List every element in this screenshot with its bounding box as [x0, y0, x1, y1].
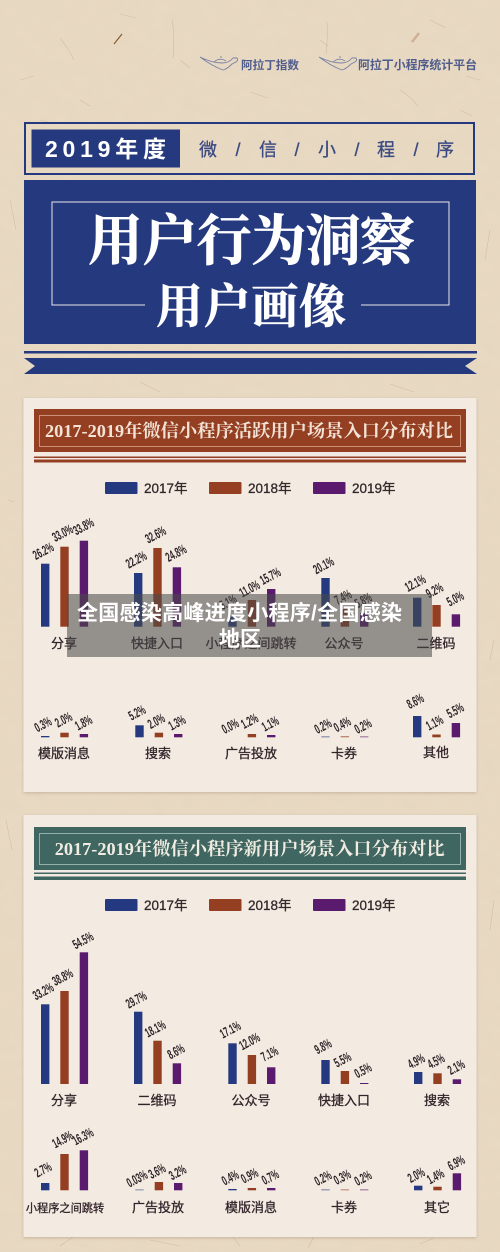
chart: 小程序之间跳转 — [26, 1125, 104, 1215]
chart: 快捷入口 — [312, 1036, 375, 1108]
chart: 快捷入口: 22.2% — [124, 549, 150, 572]
icon: Aladdin lamp right — [319, 56, 357, 70]
subject text: 微 — [199, 140, 217, 160]
chart: 其它: 6.9% — [446, 1153, 468, 1174]
chart: 公众号: 7.1% — [259, 1044, 281, 1065]
chart: 公众号 — [218, 1019, 281, 1108]
chart: 卡券: 卡券 — [331, 1200, 357, 1215]
chart: 分享: 分享 — [51, 1093, 77, 1108]
panel: new users — [24, 815, 476, 1237]
logos: Aladdin index and stats platform — [200, 56, 477, 72]
chart: 广告投放: 3.6% — [146, 1161, 169, 1182]
subject text — [199, 140, 454, 160]
chart: 广告投放 — [124, 1161, 189, 1215]
chart: 二维码: 二维码 — [416, 636, 456, 651]
chart: 模版消息: 0.7% — [260, 1167, 282, 1188]
chart: 公众号: 12.0% — [237, 1030, 263, 1054]
chart: 小程序之间跳转: 小程序之间跳转 — [205, 636, 297, 651]
chart: 模版消息: 模版消息 — [225, 1200, 277, 1215]
main title panel — [24, 180, 476, 344]
chart: 公众号: 公众号 — [324, 636, 364, 651]
heading: new users: 2017-2019年微信小程序新用户场景入口分布对比 — [55, 838, 445, 859]
chart: 卡券: 0.2% — [312, 1168, 335, 1189]
heading: active users — [34, 409, 466, 462]
chart: 模版消息 — [32, 710, 95, 761]
chart: 分享 — [31, 515, 97, 651]
text: Aladdin mini program stats platform: 阿拉丁小程序统计平台 — [358, 58, 477, 72]
subject text: / — [354, 140, 360, 160]
year text: 2019年度 — [45, 136, 166, 162]
subject text: / — [294, 140, 300, 160]
legend: 2017年 — [144, 481, 188, 496]
chart: 搜索: 搜索 — [424, 1093, 450, 1108]
chart: 其它 — [406, 1153, 468, 1215]
chart: 小程序之间跳转: 小程序之间跳转 — [26, 1201, 104, 1215]
chart: 分享: 38.8% — [50, 966, 76, 989]
legend: 2019年 — [352, 481, 396, 496]
chart: 其他: 5.5% — [445, 700, 467, 722]
chart: 其他: 其他 — [423, 745, 449, 760]
chart: 二维码: 二维码 — [137, 1093, 177, 1108]
main title: 用户行为洞察 — [88, 211, 415, 272]
chart: 模版消息: 2.0% — [53, 710, 75, 731]
chart: 卡券: 0.2% — [352, 716, 375, 737]
chart: 快捷入口: 24.8% — [163, 542, 189, 565]
chart: 快捷入口: 快捷入口 — [318, 1093, 370, 1108]
subject text: 程 — [377, 140, 395, 160]
chart: 二维码 — [403, 572, 467, 651]
chart: 卡券: 0.3% — [332, 1167, 354, 1188]
chart: 快捷入口: 快捷入口 — [131, 636, 183, 651]
overlay caption: 地区 — [219, 628, 261, 651]
chart: 模版消息: 0.4% — [220, 1168, 242, 1189]
chart: 卡券 — [312, 1167, 375, 1215]
chart: 公众号: 公众号 — [231, 1093, 271, 1108]
chart: 模版消息 — [220, 1166, 282, 1215]
legend: 2018年 — [248, 481, 292, 496]
chart: 模版消息: 0.3% — [32, 714, 55, 736]
chart: 二维码: 9.2% — [424, 580, 446, 602]
chart: 其他: 8.6% — [405, 691, 427, 712]
chart: 搜索 — [126, 703, 189, 761]
chart: 广告投放: 1.2% — [239, 711, 261, 732]
overlay caption — [67, 594, 432, 657]
chart: 广告投放: 0.0% — [220, 716, 242, 737]
chart: 卡券: 卡券 — [331, 746, 357, 761]
icon: Aladdin lamp left — [200, 56, 238, 70]
chart: 广告投放: 1.1% — [260, 714, 282, 735]
chart: 快捷入口: 32.6% — [143, 524, 169, 547]
chart: 分享: 26.2% — [31, 540, 57, 563]
chart: 搜索: 搜索 — [145, 746, 171, 761]
chart: 快捷入口: 5.5% — [332, 1050, 354, 1071]
chart: 公众号: 7.4% — [332, 587, 355, 608]
chart: 模版消息: 0.9% — [239, 1166, 261, 1187]
legend — [105, 898, 396, 913]
chart: 分享: 33.8% — [71, 515, 97, 539]
chart: 二维码: 12.1% — [403, 572, 429, 595]
chart: 二维码: 5.0% — [445, 589, 467, 610]
chart: 广告投放 — [220, 711, 282, 761]
legend: 2017年 — [144, 898, 188, 913]
chart: 小程序之间跳转: 11.0% — [237, 578, 263, 601]
chart: 搜索: 1.3% — [166, 713, 189, 734]
chart: 快捷入口: 0.5% — [352, 1060, 375, 1082]
chart: 广告投放: 0.03% — [124, 1168, 150, 1191]
chart: 搜索: 5.2% — [126, 703, 149, 724]
chart: 小程序之间跳转: 2.7% — [32, 1160, 55, 1181]
chart: 分享: 54.5% — [70, 929, 96, 953]
chart: 广告投放: 广告投放 — [132, 1200, 184, 1215]
chart: 二维码 — [124, 989, 188, 1108]
chart: 小程序之间跳转 — [205, 565, 297, 651]
chart: 其它: 其它 — [424, 1200, 450, 1215]
header bar: year and subject — [25, 123, 474, 174]
chart: 搜索: 4.9% — [406, 1051, 428, 1072]
chart: 广告投放: 广告投放 — [225, 746, 277, 761]
chart: 模版消息: 1.8% — [73, 713, 95, 734]
chart: 分享: 分享 — [51, 636, 77, 651]
subtitle: 用户画像 — [156, 282, 346, 334]
chart: 模版消息: 模版消息 — [38, 746, 90, 761]
chart: 其他: 1.1% — [424, 713, 446, 734]
text: Aladdin index: 阿拉丁指数 — [241, 58, 300, 72]
chart: 搜索 — [406, 1051, 468, 1108]
chart: 分享: 33.2% — [31, 980, 57, 1004]
subject text: / — [235, 140, 241, 160]
legend — [105, 481, 396, 496]
subject text: 信 — [259, 140, 277, 160]
panel: active users — [24, 398, 476, 792]
heading: new users — [34, 827, 466, 880]
chart: 二维码: 18.1% — [143, 1018, 169, 1041]
chart: 快捷入口 — [124, 524, 189, 651]
chart: 公众号: 20.1% — [311, 554, 337, 578]
chart: 二维码: 8.6% — [165, 1041, 188, 1063]
chart: 卡券 — [312, 714, 375, 761]
chart: 快捷入口: 9.8% — [312, 1036, 335, 1058]
year badge — [32, 130, 180, 168]
chart: 公众号: 17.1% — [218, 1019, 244, 1042]
chart: 搜索: 2.1% — [446, 1057, 468, 1078]
chart: 搜索: 4.5% — [425, 1051, 448, 1072]
heading: active users: 2017-2019年微信小程序活跃用户场景入口分布对比 — [45, 420, 453, 441]
legend: 2018年 — [248, 898, 292, 913]
chart: 公众号: 5.8% — [353, 590, 375, 612]
chart: 二维码: 29.7% — [124, 989, 150, 1012]
chart: 公众号 — [311, 554, 375, 651]
chart: 其他 — [405, 691, 467, 760]
overlay caption: 全国感染高峰进度小程序/全国感染 — [77, 601, 402, 625]
subject text: / — [413, 140, 419, 160]
chart: 分享: 33.0% — [50, 522, 76, 545]
chart: 分享 — [31, 929, 96, 1108]
chart: 卡券: 0.2% — [352, 1168, 375, 1189]
chart: 卡券: 0.2% — [312, 716, 335, 737]
ribbon below title — [24, 351, 477, 374]
chart: 小程序之间跳转: 16.3% — [70, 1125, 96, 1149]
chart: 小程序之间跳转: 5.1% — [218, 592, 240, 613]
chart: 其它: 2.0% — [406, 1165, 428, 1186]
chart: 搜索: 2.0% — [146, 711, 168, 732]
chart: 其它: 1.4% — [425, 1166, 447, 1188]
chart: 小程序之间跳转: 15.7% — [258, 565, 284, 588]
legend: 2019年 — [352, 898, 396, 913]
subject text: 序 — [436, 140, 454, 160]
subject text: 小 — [318, 140, 336, 160]
chart: 卡券: 0.4% — [332, 714, 354, 736]
chart: 广告投放: 3.2% — [167, 1162, 189, 1184]
chart: 小程序之间跳转: 14.9% — [50, 1128, 76, 1152]
